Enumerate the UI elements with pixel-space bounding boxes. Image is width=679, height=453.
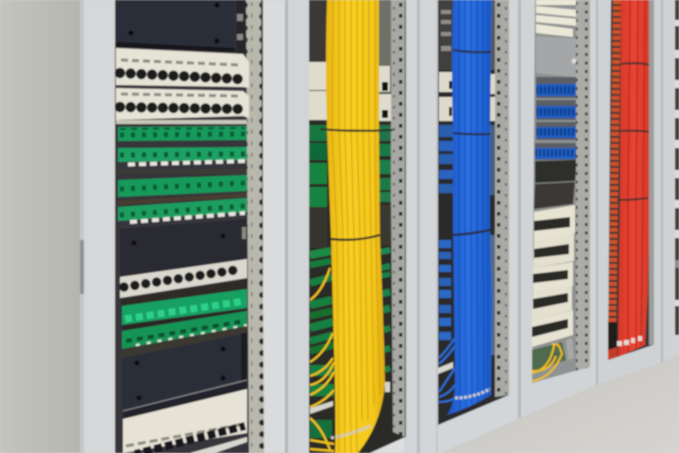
door 3 frame with blue-cable opening	[420, 0, 520, 453]
bottom green module	[532, 338, 574, 372]
green fibre panel 5	[121, 279, 247, 325]
rack 1 equipment	[116, 0, 249, 453]
cream patch panel 1	[116, 48, 249, 88]
green fibre panel 2 with labels	[118, 147, 247, 164]
middle black panel	[120, 219, 247, 276]
door 2 frame with rack opening	[288, 0, 420, 453]
cable ties on yellow bundle	[320, 129, 393, 438]
loose yellow cables	[310, 268, 334, 451]
yellow cable bundle	[320, 0, 393, 453]
green fibre panel 1	[116, 120, 247, 141]
cream patch panels	[532, 205, 575, 347]
sloped cream patch panel	[120, 259, 247, 298]
rack 2 rail	[391, 0, 405, 437]
door 1 frame with rack opening	[84, 0, 288, 453]
orange patch cords	[608, 0, 617, 360]
green fibre panel 6	[122, 308, 247, 349]
cable ties on blue bundle	[453, 50, 491, 398]
floor	[441, 355, 679, 453]
rack 3 rail	[495, 0, 509, 397]
bottom cream patch panel	[123, 389, 247, 453]
door 5 frame with red-cable opening	[596, 0, 662, 385]
left cabinet side panel	[0, 0, 85, 453]
rack 5 rail	[649, 0, 654, 345]
rack 4 equipment	[532, 0, 582, 381]
top black blanking panel	[116, 0, 246, 55]
green fibre panel 3	[118, 169, 247, 197]
blue cable bundle	[447, 0, 492, 415]
door 6 frame, far right	[661, 0, 679, 362]
door 2 lower frame	[309, 437, 405, 453]
rack 4 rail	[576, 0, 590, 371]
lower black panel	[122, 326, 247, 420]
blue fibre panels	[535, 77, 581, 160]
cream strips	[536, 0, 580, 37]
rack 2 panels behind cables	[309, 0, 391, 438]
yellow patch cords	[532, 344, 562, 381]
green fibre panel 4 with labels	[118, 193, 247, 222]
rack 3 panels behind blue cables	[438, 0, 498, 402]
red cable bundle	[617, 0, 652, 357]
rack 1 mounting rail	[246, 0, 264, 453]
gray blank panel	[536, 36, 582, 78]
black panels	[534, 160, 577, 209]
cream patch panel 2	[116, 88, 249, 120]
door 4 frame with opening	[518, 0, 597, 420]
red bundle ties and markers	[617, 63, 651, 346]
